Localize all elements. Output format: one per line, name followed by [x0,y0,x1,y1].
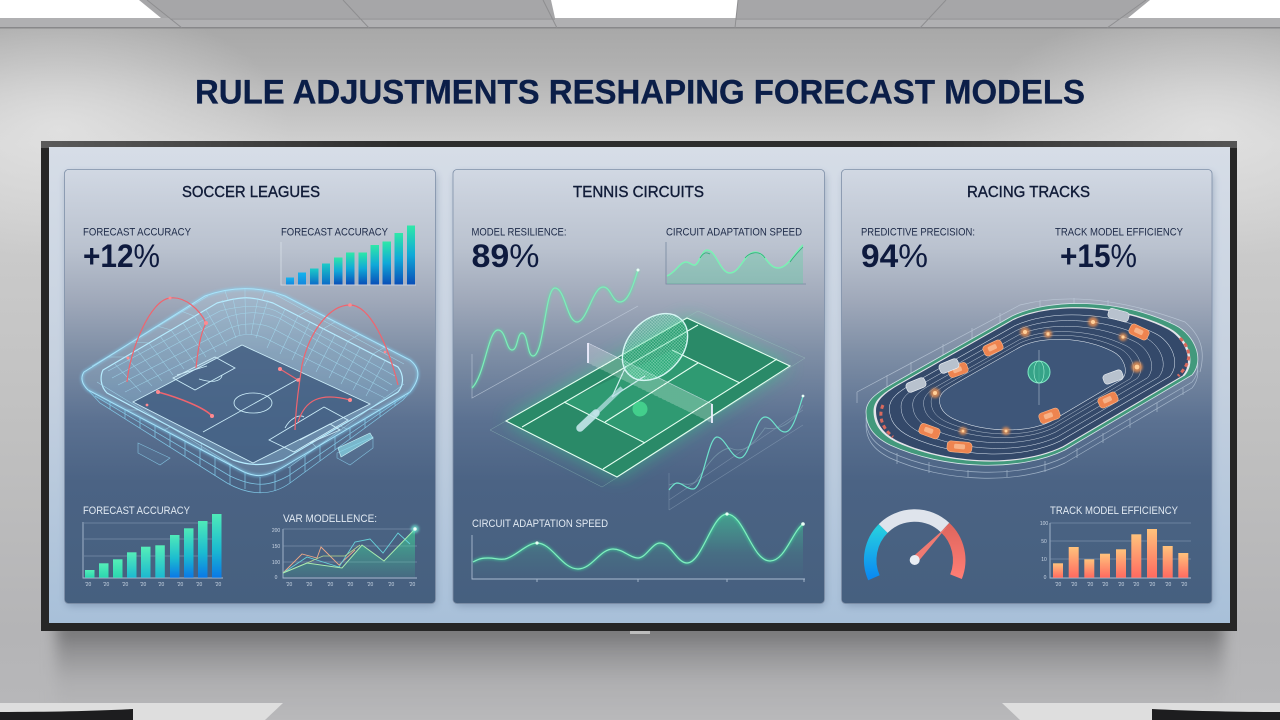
line chart: var modellence: 100 [272,560,280,566]
bar chart: track model efficiency: '20 [1133,582,1139,588]
stadium inner bowl [101,298,403,464]
line chart: var modellence: '20 [286,582,292,588]
gauge hub [910,555,920,565]
line chart: lower right curve [669,395,804,510]
bar chart: track model efficiency [1040,505,1191,588]
white cars [905,308,1130,393]
soccer pitch [133,345,370,463]
glowing markers [930,317,1142,435]
heading: racing tracks: RACING TRACKS [967,184,1090,201]
track green verge [866,303,1198,465]
stat: predictive precision 94%: PREDICTIVE PRECISION: [861,226,975,238]
bar chart: track model efficiency: '20 [1181,582,1187,588]
line chart: var modellence [272,513,419,588]
bar chart: forecast accuracy mini [281,226,416,285]
stat: track model efficiency +15%: TRACK MODEL EFFICIENCY [1055,226,1184,238]
bar chart: track model efficiency: 50 [1041,539,1047,545]
bar chart: track model efficiency: '20 [1071,582,1077,588]
bar chart: forecast accuracy [83,505,223,588]
track curbs [881,338,1189,437]
tennis net [588,343,712,423]
bar chart: forecast accuracy: '20 [215,582,221,588]
panel: tennis circuits [453,170,825,606]
stadium glow [82,288,418,476]
area chart: circuit adaptation speed [472,512,805,582]
title: RULE ADJUSTMENTS RESHAPING FORECAST MODELS [195,74,1085,112]
trajectory points [126,296,386,418]
track lanes [889,315,1175,454]
bar chart: forecast accuracy: FORECAST ACCURACY [83,505,191,517]
bar chart: track model efficiency: '20 [1165,582,1171,588]
bar chart: forecast accuracy mini: FORECAST ACCURACY [281,226,389,238]
bar chart: track model efficiency: TRACK MODEL EFFICIENCY [1050,505,1179,517]
stadium bright stand block [338,433,373,457]
stat: track model efficiency +15% [1055,226,1184,274]
wall display monitor [41,141,1237,634]
stat: predictive precision 94%: 94% [861,238,928,274]
bar chart: track model efficiency: 10 [1041,557,1047,563]
bar chart: track model efficiency: '20 [1102,582,1108,588]
foreground desk right [1002,703,1280,720]
stadium lower wall [88,390,410,493]
track white edge [874,307,1190,462]
line chart: var modellence: '20 [388,582,394,588]
stadium support blocks [138,437,373,465]
line chart: var modellence: '20 [367,582,373,588]
bar chart: track model efficiency: '20 [1055,582,1061,588]
stat: model resilience 89% [472,226,566,274]
bar chart: track model efficiency: '20 [1149,582,1155,588]
line chart: var modellence: '20 [347,582,353,588]
stat: forecast accuracy +12%: FORECAST ACCURACY [83,226,192,238]
tennis court [490,301,805,487]
tennis racket [580,301,701,428]
area chart: circuit adaptation speed mini [666,226,806,284]
bar chart: forecast accuracy: '20 [158,582,164,588]
green globe marker [1028,350,1050,405]
ceiling with lights [0,0,1280,28]
area chart: circuit adaptation speed mini: CIRCUIT ADAPTATION SPEED [666,226,802,238]
line chart: var modellence: '20 [327,582,333,588]
bar chart: track model efficiency: '20 [1118,582,1124,588]
orange cars [918,323,1150,454]
bar chart: track model efficiency: '20 [1087,582,1093,588]
stadium seating grid [92,288,404,468]
stat: model resilience 89%: MODEL RESILIENCE: [472,226,566,238]
stat: forecast accuracy +12%: +12% [83,238,160,274]
bar chart: forecast accuracy: '20 [85,582,91,588]
track lower wall [866,310,1198,478]
stat: predictive precision 94% [861,226,975,274]
line chart: var modellence: 0 [275,575,278,581]
track asphalt [876,308,1188,460]
gauge [870,516,959,578]
panel: racing tracks [842,170,1213,606]
wireframe stadium [82,288,418,493]
stat: forecast accuracy +12% [83,226,192,274]
bar chart: forecast accuracy: '20 [140,582,146,588]
line chart: upper left resilience curve [472,268,640,398]
track upper fence [857,298,1202,403]
bar chart: forecast accuracy: '20 [103,582,109,588]
bar chart: forecast accuracy: '20 [196,582,202,588]
track infield [939,339,1125,430]
gauge needle [912,526,948,562]
panel: soccer leagues [64,170,436,606]
red trajectory arcs [127,298,398,430]
car roofs [924,327,1144,450]
race track [857,298,1202,478]
stadium outer shell [82,288,418,476]
stat: model resilience 89%: 89% [472,238,540,274]
bar chart: track model efficiency: 0 [1044,575,1047,581]
line chart: var modellence: '20 [409,582,415,588]
heading: tennis circuits: TENNIS CIRCUITS [573,184,704,201]
line chart: var modellence: VAR MODELLENCE: [283,513,377,525]
bar chart: track model efficiency: 100 [1040,521,1048,527]
line chart: var modellence: '20 [306,582,312,588]
heading: soccer leagues: SOCCER LEAGUES [182,184,320,201]
foreground desk left [0,703,283,720]
stat: track model efficiency +15%: +15% [1060,238,1137,274]
line chart: var modellence: 200 [272,528,280,534]
tennis ball [632,402,648,416]
area chart: circuit adaptation speed: CIRCUIT ADAPTATION SPEED [472,518,608,530]
line chart: var modellence: 150 [272,544,280,550]
bar chart: forecast accuracy: '20 [177,582,183,588]
bar chart: forecast accuracy: '20 [122,582,128,588]
